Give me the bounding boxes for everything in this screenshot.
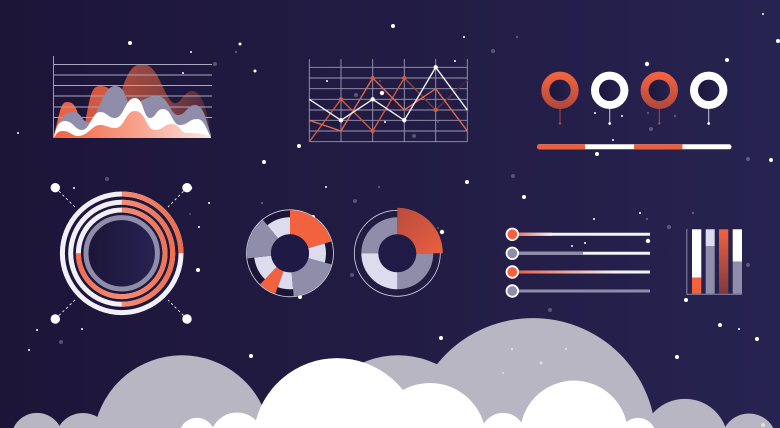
slider 4 <box>506 285 650 297</box>
grey long segments <box>259 222 321 284</box>
bar 4 <box>733 229 742 294</box>
orange peak area <box>54 102 81 138</box>
bar 1 <box>692 229 701 294</box>
corner dots <box>51 183 192 324</box>
orange series <box>309 78 467 131</box>
lavender quadrant <box>361 253 397 289</box>
concentric radial chart <box>51 183 192 324</box>
donut base and outline <box>246 210 334 297</box>
ring 4 <box>694 76 723 105</box>
front gradient area <box>54 111 211 138</box>
red markers <box>339 76 438 133</box>
middle ring <box>71 202 173 304</box>
center disc <box>86 218 157 289</box>
donut hole <box>271 234 309 272</box>
segmented donut chart <box>246 210 334 297</box>
grey back clouds <box>13 318 773 428</box>
stem dots <box>559 122 710 125</box>
slider bars <box>506 228 650 297</box>
ring indicators with progress bar <box>537 76 732 149</box>
lavender short segments <box>262 226 318 281</box>
fading red series <box>309 78 467 142</box>
ring 2 <box>595 76 624 105</box>
slider 2 <box>506 248 650 259</box>
outer ring <box>62 194 181 313</box>
ring 3 <box>645 76 674 105</box>
back dark red area <box>108 64 210 138</box>
line chart <box>309 59 468 142</box>
grey quadrant top left <box>361 217 397 253</box>
chart grid lines <box>54 56 212 138</box>
inner ring <box>78 210 165 297</box>
stacked bar chart <box>687 229 742 294</box>
red series start <box>309 78 404 142</box>
white front clouds <box>181 358 654 428</box>
grey area <box>55 86 211 138</box>
bar 3 <box>719 229 728 294</box>
stems <box>560 108 659 123</box>
area chart <box>54 56 212 138</box>
donut hole <box>378 234 416 272</box>
grey quadrant bottom right <box>397 253 433 289</box>
clouds <box>13 318 773 428</box>
white markers <box>339 65 438 123</box>
slider 3 <box>506 266 650 278</box>
ring 1 <box>545 76 575 105</box>
connector lines <box>55 188 187 319</box>
line chart grid <box>309 59 468 142</box>
white stems <box>610 108 709 123</box>
bar 2 <box>706 229 715 294</box>
outline ring <box>354 210 440 296</box>
white series <box>309 67 467 120</box>
axes <box>687 229 742 294</box>
white area <box>54 98 211 138</box>
quadrant donut chart <box>354 208 443 296</box>
red peak area <box>84 86 122 138</box>
orange quadrant <box>397 208 443 253</box>
stars <box>17 13 780 359</box>
orange long segments <box>259 222 321 284</box>
segmented progress bar <box>537 144 732 149</box>
slider 1 <box>506 228 650 240</box>
stars over grey cloud <box>502 348 765 427</box>
